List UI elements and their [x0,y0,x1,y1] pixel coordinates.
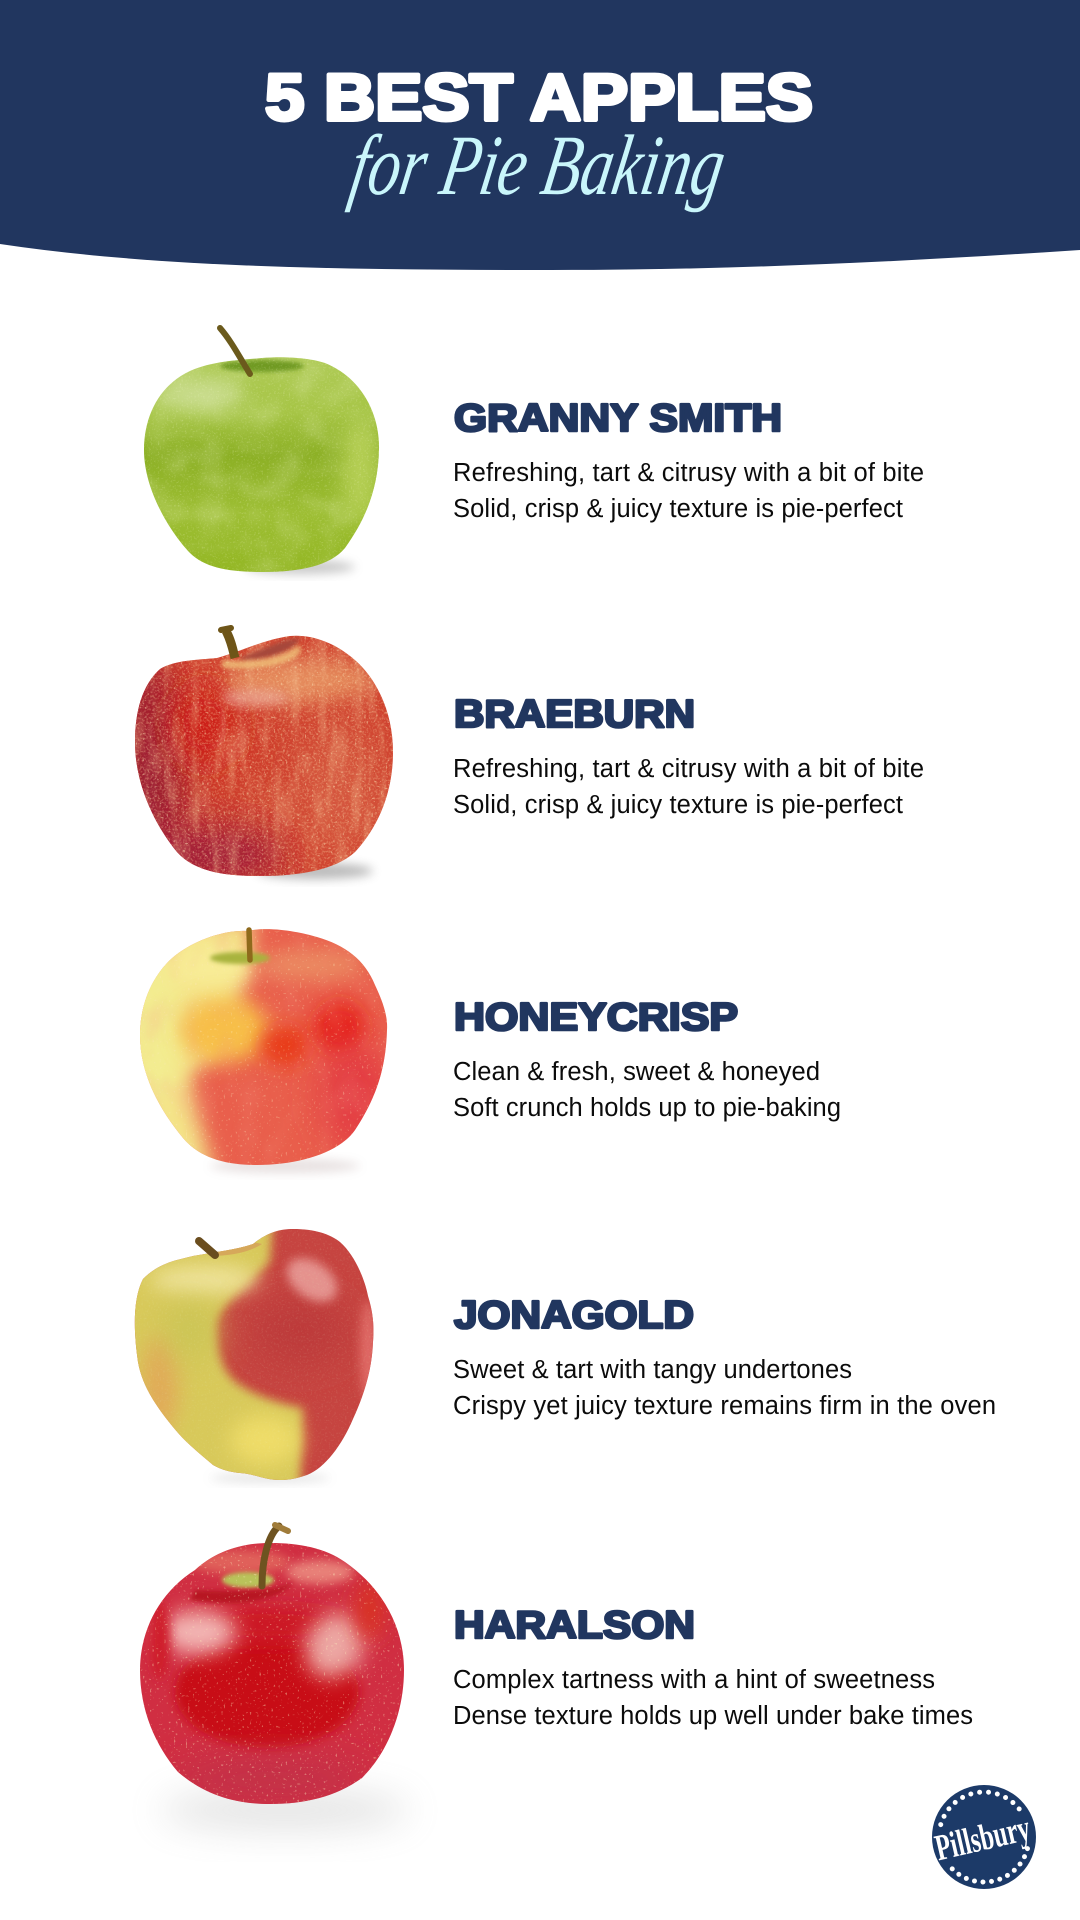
stem [262,1526,279,1586]
heading: 5 best apples: 5 BEST APPLES [265,60,813,134]
description [453,1356,996,1420]
description [453,1666,973,1730]
name: HARALSON [454,1604,695,1647]
title [265,60,813,213]
apple: braeburn [135,625,393,884]
apple: honeycrisp [140,927,388,1176]
row: haralson [130,1525,973,1830]
description: Solid, crisp & juicy texture is pie-perfect [453,791,903,819]
description: Clean & fresh, sweet & honeyed [453,1058,820,1086]
description [453,1058,841,1122]
stem [199,1241,215,1255]
description [453,755,924,819]
description: Refreshing, tart & citrusy with a bit of bite [453,459,924,487]
header band [0,0,1080,270]
apple: haralson [130,1525,415,1830]
name: JONAGOLD [454,1294,694,1337]
subtitle: for pie baking: for Pie Baking [344,118,732,213]
apple: granny smith [144,325,380,579]
apple: jonagold [134,1229,374,1486]
row: jonagold [125,1220,996,1490]
row: honeycrisp [125,920,841,1175]
name: HONEYCRISP [454,996,738,1039]
stem [226,631,235,658]
logo: pillsbury: Pillsbury [931,1808,1034,1869]
description [453,459,924,523]
description: Solid, crisp & juicy texture is pie-perfect [453,495,903,523]
logo: pillsbury [931,1785,1036,1889]
description: Soft crunch holds up to pie-baking [453,1094,841,1122]
description: Complex tartness with a hint of sweetness [453,1666,935,1694]
stem [220,328,250,374]
name: GRANNY SMITH [454,397,782,440]
description: Crispy yet juicy texture remains firm in the oven [453,1392,996,1420]
row: granny smith [130,328,924,580]
row: braeburn [115,625,924,885]
description: Refreshing, tart & citrusy with a bit of bite [453,755,924,783]
stem [249,930,250,960]
name: BRAEBURN [454,693,695,736]
description: Dense texture holds up well under bake times [453,1702,973,1730]
description: Sweet & tart with tangy undertones [453,1356,852,1384]
